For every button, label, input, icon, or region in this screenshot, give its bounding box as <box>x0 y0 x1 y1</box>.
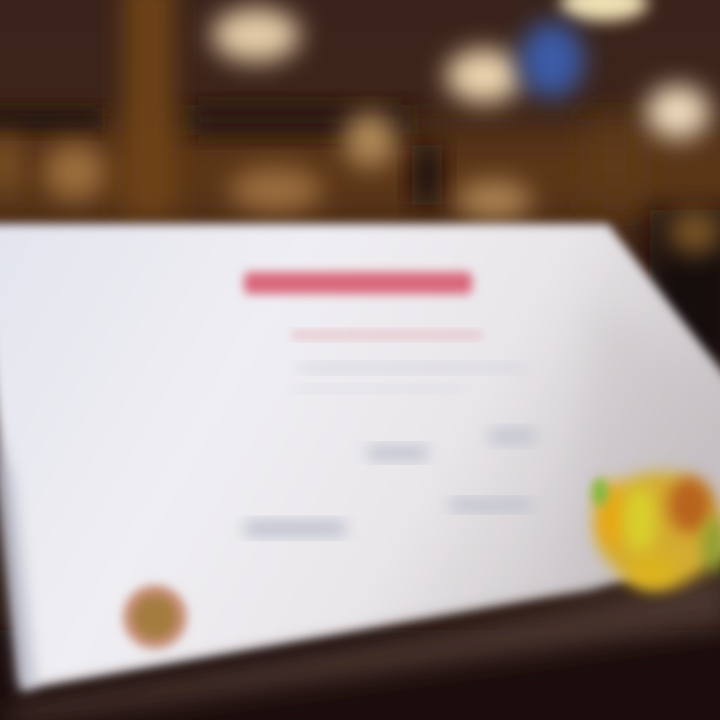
certificate body text: blurred lines <box>245 364 535 535</box>
table edge below paper <box>0 565 720 720</box>
ceiling lights: blurred bokeh <box>0 0 720 254</box>
certificate heading: blurred red text <box>244 272 482 339</box>
paper shaded left edge <box>0 410 34 690</box>
blue light <box>520 22 584 98</box>
seal: round bronze medallion <box>123 585 187 649</box>
paper lower right shade <box>560 300 720 590</box>
colourful flowers at right <box>592 472 720 588</box>
certificate paper <box>0 224 720 690</box>
table foreground shadow <box>0 630 720 720</box>
